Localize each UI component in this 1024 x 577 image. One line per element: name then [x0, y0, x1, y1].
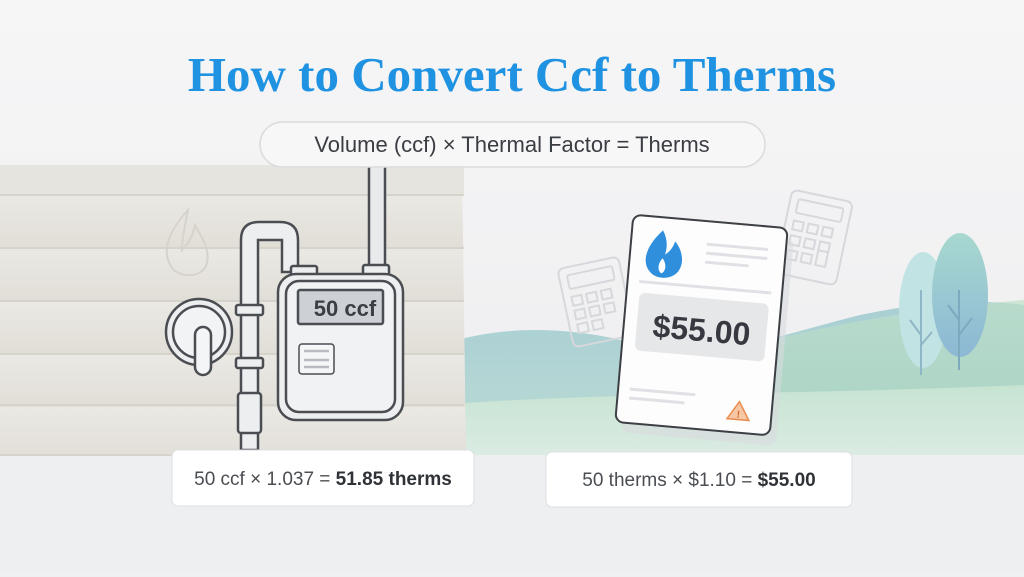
icon: faint flame on wall: [167, 210, 208, 275]
gas bill document: [614, 215, 795, 446]
title: How to Convert Ccf to Therms: [188, 47, 836, 102]
trees: [899, 233, 988, 375]
house siding: [0, 165, 466, 455]
landscape hills: [0, 300, 1024, 572]
gas bill document: !: [736, 409, 740, 421]
result box: ccf to therms: [172, 450, 474, 506]
gas bill document: $55.00: [651, 308, 752, 352]
formula pill: Volume (ccf) × Thermal Factor = Therms: [314, 132, 710, 157]
result box: ccf to therms: 50 ccf × 1.037 = 51.85 therms: [194, 469, 452, 490]
gas meter with pipes: [166, 165, 403, 450]
result box: therms to cost: 50 therms × $1.10 = $55.00: [582, 470, 816, 491]
formula pill: [260, 122, 765, 167]
calculators: [557, 189, 853, 348]
result box: therms to cost: [546, 452, 852, 507]
meter reading: 50 ccf: [314, 296, 377, 321]
